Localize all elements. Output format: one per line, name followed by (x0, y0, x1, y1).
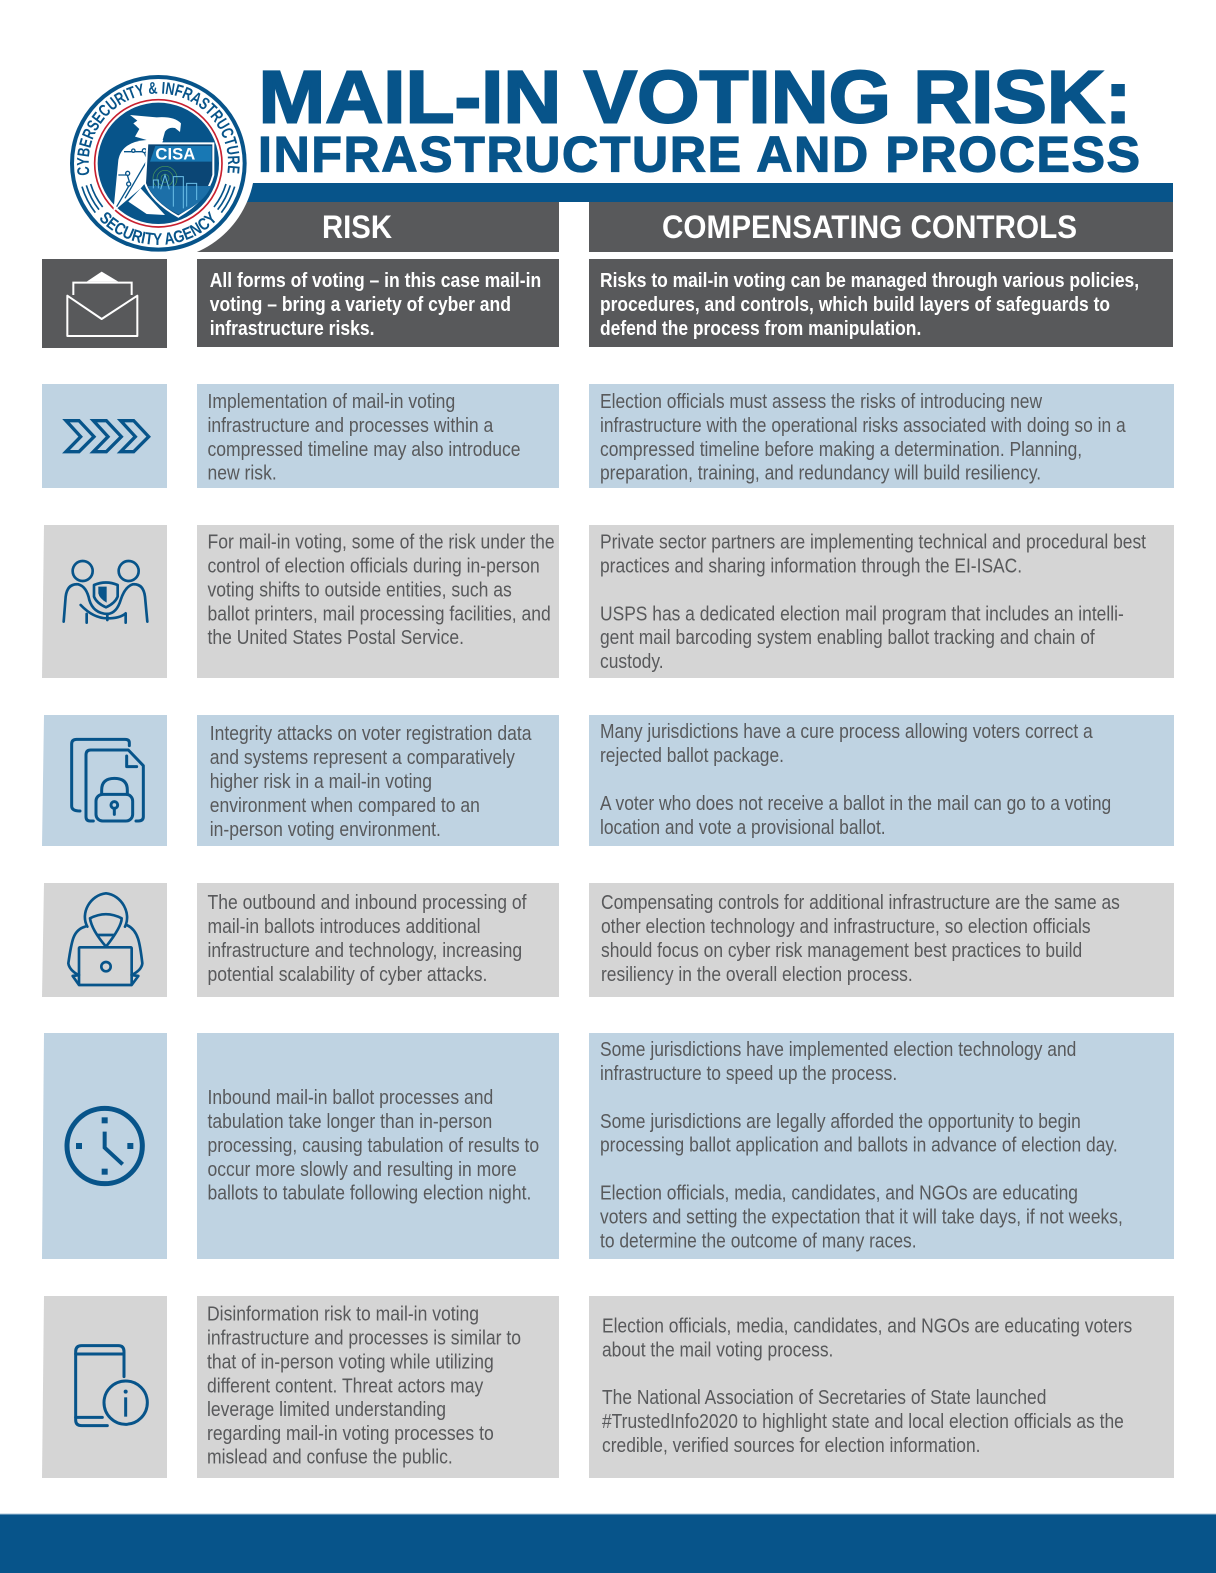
controls text: USPS has a dedicated election mail program that includes an intelli- (600, 603, 1124, 626)
controls text: The National Association of Secretaries of State launched (602, 1387, 1046, 1409)
column heading: risk: RISK (322, 209, 392, 245)
controls text: Compensating controls for additional infrastructure are the same as (601, 892, 1120, 914)
controls text: intro: Risks to mail-in voting can be managed through various policies, (600, 270, 1139, 292)
icon: hooded hacker with laptop (42, 883, 167, 997)
controls text: should focus on cyber risk management best practices to build (601, 940, 1082, 962)
risk text: Implementation of mail-in voting (208, 391, 455, 413)
header bar (197, 183, 1173, 202)
risk text: different content. Threat actors may (207, 1375, 484, 1398)
controls text: infrastructure to speed up the process. (600, 1063, 897, 1085)
risk text: Disinformation risk to mail-in voting (207, 1304, 479, 1326)
row 2: compressed timeline (42, 384, 1174, 488)
controls text: Election officials, media, candidates, and NGOs are educating (600, 1182, 1078, 1205)
CISA logo: CYBERSECURITY & INFRASTRUCTURE (76, 82, 240, 176)
footer bar (0, 1514, 1216, 1573)
icon: chevrons (42, 384, 167, 488)
risk text (197, 1296, 559, 1478)
title (258, 56, 1140, 182)
risk text: Inbound mail-in ballot processes and (208, 1087, 493, 1109)
controls text (589, 715, 1174, 846)
controls text: intro: procedures, and controls, which build layers of safeguards to (600, 294, 1110, 316)
controls text: gent mail barcoding system enabling ballot tracking and chain of (600, 627, 1095, 649)
risk text: For mail-in voting, some of the risk under the (208, 531, 555, 554)
title: INFRASTRUCTURE AND PROCESS (258, 126, 1140, 182)
column heading: risk (197, 202, 559, 252)
controls text: compressed timeline before making a determination. Planning, (600, 439, 1082, 461)
risk text: potential scalability of cyber attacks. (208, 964, 487, 986)
controls text: Some jurisdictions are legally afforded the opportunity to begin (600, 1111, 1081, 1133)
risk text: the United States Postal Service. (208, 627, 464, 649)
risk text: intro (197, 259, 559, 347)
risk text: voting shifts to outside entities, such as (208, 579, 512, 602)
controls text: resiliency in the overall election process. (601, 964, 913, 986)
column heading: compensating controls: COMPENSATING CONTROLS (662, 209, 1077, 245)
controls text: preparation, training, and redundancy will build resiliency. (600, 462, 1041, 485)
controls text: credible, verified sources for election information. (602, 1435, 981, 1457)
risk text: mislead and confuse the public. (207, 1446, 453, 1469)
risk text: occur more slowly and resulting in more (208, 1159, 517, 1181)
risk text: Integrity attacks on voter registration data (210, 723, 532, 745)
controls text: practices and sharing information through the EI-ISAC. (600, 555, 1022, 578)
controls text (589, 883, 1174, 997)
risk text (197, 1033, 559, 1259)
risk text (197, 384, 559, 488)
row 3: outside entities (42, 525, 1174, 678)
risk text: infrastructure and processes is similar to (207, 1327, 521, 1350)
controls text (589, 384, 1174, 488)
risk text: intro: voting – bring a variety of cyber and (210, 294, 511, 316)
controls text: custody. (600, 651, 664, 673)
controls text (589, 1033, 1174, 1259)
risk text: compressed timeline may also introduce (208, 439, 521, 461)
controls text: intro (589, 259, 1173, 347)
row 6: slower tabulation (42, 1033, 1174, 1259)
risk text: intro: infrastructure risks. (210, 318, 375, 340)
risk text: control of election officials during in-person (208, 555, 540, 578)
risk text: leverage limited understanding (207, 1399, 446, 1421)
risk text: processing, causing tabulation of results to (208, 1135, 539, 1157)
controls text: Election officials, media, candidates, and NGOs are educating voters (602, 1315, 1132, 1338)
risk text: that of in-person voting while utilizing (207, 1351, 494, 1374)
risk text (197, 715, 559, 846)
controls text: intro: defend the process from manipulation. (600, 318, 921, 340)
row 4: integrity attacks (42, 715, 1174, 846)
controls text: to determine the outcome of many races. (600, 1230, 917, 1253)
risk text: mail-in ballots introduces additional (208, 916, 481, 938)
risk text: environment when compared to an (210, 795, 480, 817)
risk text: and systems represent a comparatively (210, 747, 515, 769)
controls text (589, 1296, 1174, 1478)
risk text (197, 525, 559, 678)
risk text: intro: All forms of voting – in this case mail-in (210, 270, 541, 292)
icon: envelope (42, 259, 167, 348)
risk text: in-person voting environment. (210, 819, 441, 841)
controls text: processing ballot application and ballots in advance of election day. (600, 1134, 1118, 1157)
risk text: infrastructure and processes within a (208, 415, 494, 437)
risk text: The outbound and inbound processing of (208, 892, 527, 914)
controls text: Many jurisdictions have a cure process allowing voters correct a (600, 721, 1093, 743)
column heading: compensating controls (589, 202, 1173, 252)
controls text: Some jurisdictions have implemented election technology and (600, 1039, 1076, 1061)
icon: clock (42, 1033, 167, 1259)
risk text (197, 883, 559, 997)
controls text: other election technology and infrastructure, so election officials (601, 916, 1091, 938)
row 5: scalability of cyber attacks (42, 883, 1174, 997)
title: MAIL-IN VOTING RISK: (258, 56, 1132, 138)
controls text: voters and setting the expectation that it will take days, if not weeks, (600, 1206, 1123, 1229)
controls text: A voter who does not receive a ballot in the mail can go to a voting (600, 793, 1111, 815)
risk text: higher risk in a mail-in voting (210, 771, 432, 793)
icon: people with shield (42, 525, 167, 678)
controls text: infrastructure with the operational risks associated with doing so in a (600, 415, 1126, 437)
icon: phone with info symbol (42, 1296, 167, 1478)
controls text: #TrustedInfo2020 to highlight state and local election officials as the (602, 1411, 1124, 1433)
controls text (589, 525, 1174, 678)
controls text: Election officials must assess the risks of introducing new (600, 391, 1042, 413)
CISA logo: SECURITY AGENCY (100, 211, 215, 245)
risk text: ballot printers, mail processing facilities, and (208, 603, 551, 626)
icon: file with padlock (42, 715, 167, 846)
risk text: new risk. (208, 462, 277, 485)
risk text: regarding mail-in voting processes to (207, 1423, 494, 1445)
risk text: infrastructure and technology, increasing (208, 940, 522, 962)
row 7: disinformation (42, 1296, 1174, 1478)
row 1: intro (42, 259, 1173, 348)
controls text: location and vote a provisional ballot. (600, 817, 886, 839)
controls text: rejected ballot package. (600, 745, 784, 767)
controls text: about the mail voting process. (602, 1339, 833, 1362)
CISA logo (70, 75, 253, 252)
controls text: Private sector partners are implementing technical and procedural best (600, 531, 1147, 554)
risk text: ballots to tabulate following election night. (208, 1182, 531, 1205)
risk text: tabulation take longer than in-person (208, 1111, 492, 1133)
CISA logo: CISA (155, 144, 195, 163)
